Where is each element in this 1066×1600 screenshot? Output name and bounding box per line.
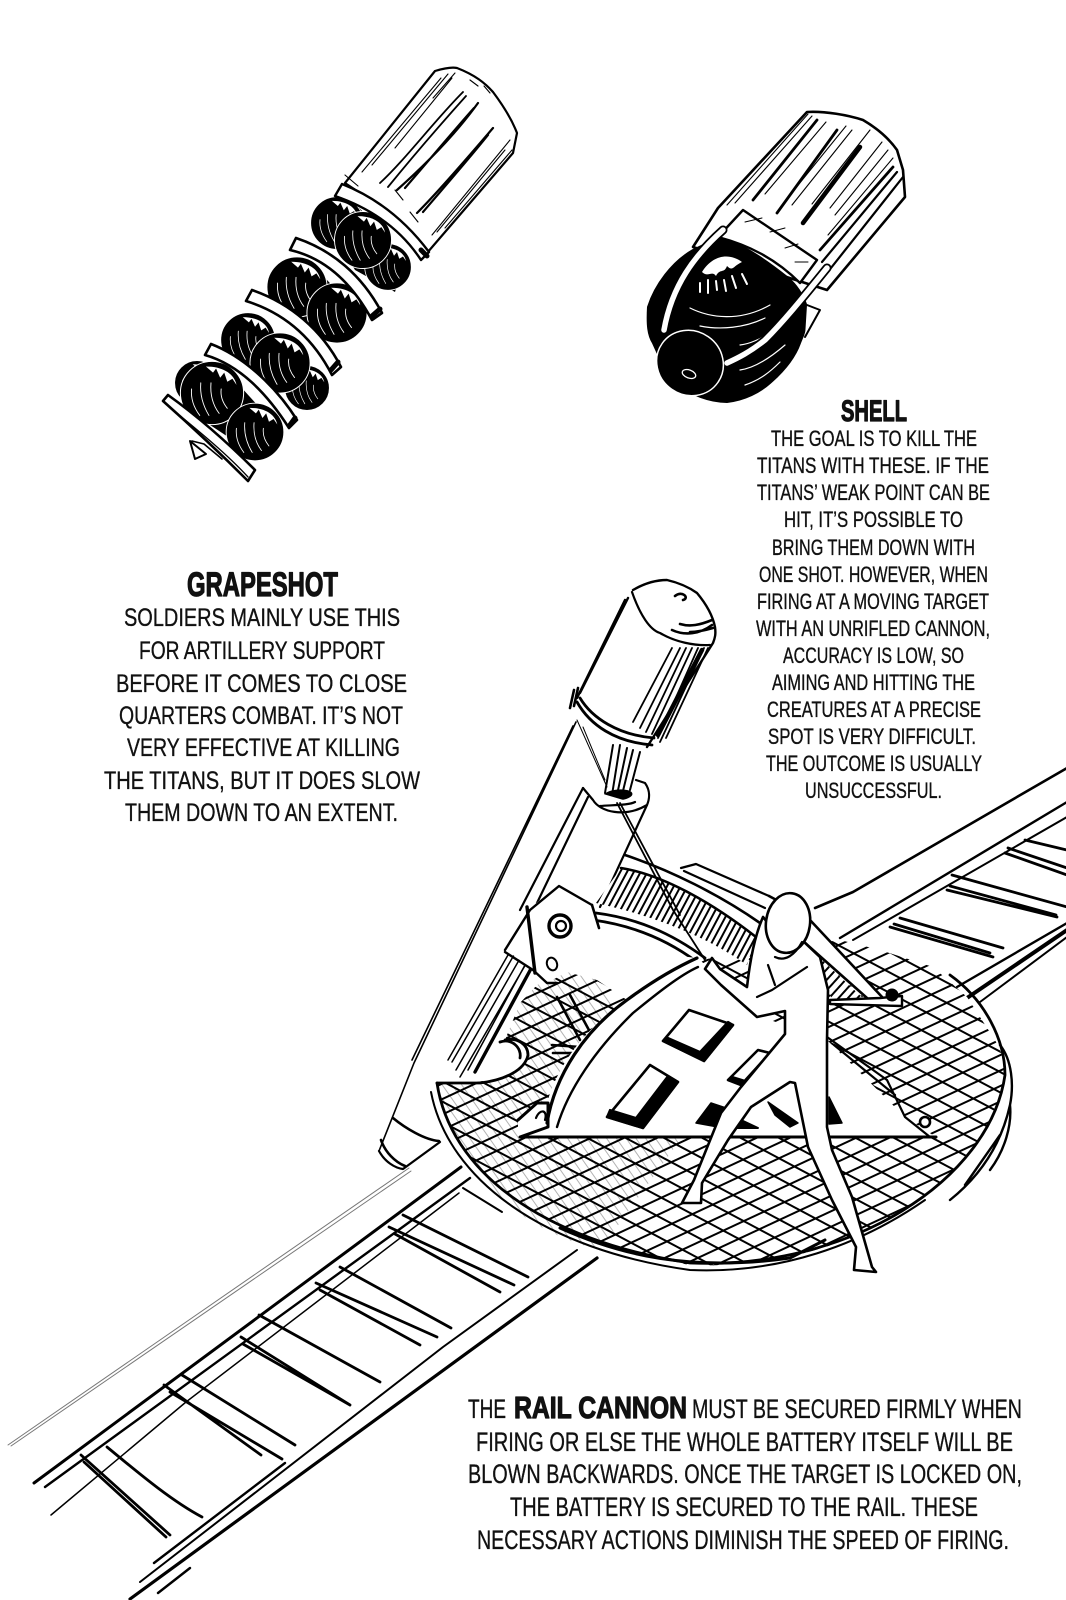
shell body text: FIRING AT A MOVING TARGET: [757, 589, 989, 614]
right arc foot bolt: [830, 989, 902, 1006]
shell body text: SPOT IS VERY DIFFICULT.: [768, 724, 976, 749]
shell tip disc: [644, 317, 736, 409]
grapeshot upper canister: [345, 68, 517, 253]
grapeshot body text: THEM DOWN TO AN EXTENT.: [125, 799, 398, 827]
shell black bomb body: [648, 237, 807, 402]
small oval hole: [545, 956, 559, 972]
shell body text: [756, 426, 990, 803]
shell body text: AIMING AND HITTING THE: [772, 670, 975, 695]
rotating platform disc: [431, 940, 1012, 1270]
figure head: [762, 890, 814, 956]
disc crossing grid: [437, 940, 1005, 1265]
grapeshot body text: [104, 604, 420, 827]
figure shoulder detail: [757, 942, 807, 997]
cannon barrel rear tube: [379, 722, 600, 1169]
heading: grapeshot: GRAPESHOT: [187, 566, 338, 604]
shell connecting band: [718, 210, 817, 283]
railway track: upper right: [815, 768, 1066, 1002]
lanyard rope: [617, 803, 705, 960]
grapeshot body text: QUARTERS COMBAT. IT’S NOT: [119, 702, 403, 730]
cannon neck and collar: [577, 720, 643, 801]
heading: shell: SHELL: [841, 395, 907, 428]
tube side hatching: [448, 955, 530, 1077]
shell white strap: [664, 230, 827, 363]
disc bold grid: [437, 940, 1005, 1265]
shell body text: TITANS WITH THESE. IF THE: [757, 453, 989, 478]
grapeshot balls: [175, 197, 411, 461]
cannon carriage slab: [520, 780, 649, 910]
shell body text: UNSUCCESSFUL.: [805, 778, 942, 803]
disc thin gray grid: [437, 972, 680, 1250]
shell body text: BRING THEM DOWN WITH: [772, 535, 975, 560]
text: rail cannon description: [468, 1390, 1022, 1555]
barrel lashing band: [577, 698, 654, 745]
text: rail cannon description: THE: [468, 1394, 506, 1424]
illustration: grapeshot canister: [163, 68, 517, 481]
toothed elevation rack: [593, 855, 769, 965]
barrel hatching: [633, 648, 708, 742]
grapeshot body text: FOR ARTILLERY SUPPORT: [139, 637, 385, 665]
shell upper canister: [693, 112, 905, 290]
heading: rail cannon: RAIL CANNON: [514, 1390, 687, 1425]
strut under bracket: [552, 995, 590, 1053]
grapeshot body text: BEFORE IT COMES TO CLOSE: [116, 670, 407, 698]
railway ties: lower left: [81, 1188, 528, 1537]
shell body text: THE GOAL IS TO KILL THE: [771, 426, 977, 451]
grapeshot body text: SOLDIERS MAINLY USE THIS: [124, 604, 400, 632]
shell body text: HIT, IT’S POSSIBLE TO: [784, 507, 963, 532]
text: grapeshot description: [104, 566, 420, 827]
grapeshot base plate and tip: [163, 395, 255, 481]
shell body text: TITANS’ WEAK POINT CAN BE: [757, 480, 990, 505]
shell dome highlight: [690, 257, 785, 385]
rail cannon body text: [468, 1394, 1022, 1555]
figure: soldier pulling lanyard: [682, 890, 876, 1272]
mount ports: [607, 1010, 842, 1128]
disc rim strokes: [431, 975, 1012, 1270]
text: shell description: [756, 395, 990, 803]
railway track: lower left: [8, 1167, 597, 1599]
shell body text: CREATURES AT A PRECISE: [767, 697, 981, 722]
grapeshot body text: VERY EFFECTIVE AT KILLING: [127, 734, 400, 762]
bracket plate with bolt: [505, 885, 697, 1053]
cannon barrel canister: [570, 580, 715, 747]
bolt hole: [549, 915, 571, 937]
shell body text: WITH AN UNRIFLED CANNON,: [756, 616, 990, 641]
shell body text: THE OUTCOME IS USUALLY: [766, 751, 982, 776]
grapeshot body text: THE TITANS, BUT IT DOES SLOW: [104, 767, 420, 795]
right support arc: [769, 896, 902, 1006]
railway ties: upper right: [890, 840, 1066, 957]
illustration: shell canister: [644, 112, 905, 409]
shell body text: ACCURACY IS LOW, SO: [783, 643, 964, 668]
arched gun mount plate: [518, 957, 936, 1137]
grapeshot separating bands: [205, 184, 429, 428]
